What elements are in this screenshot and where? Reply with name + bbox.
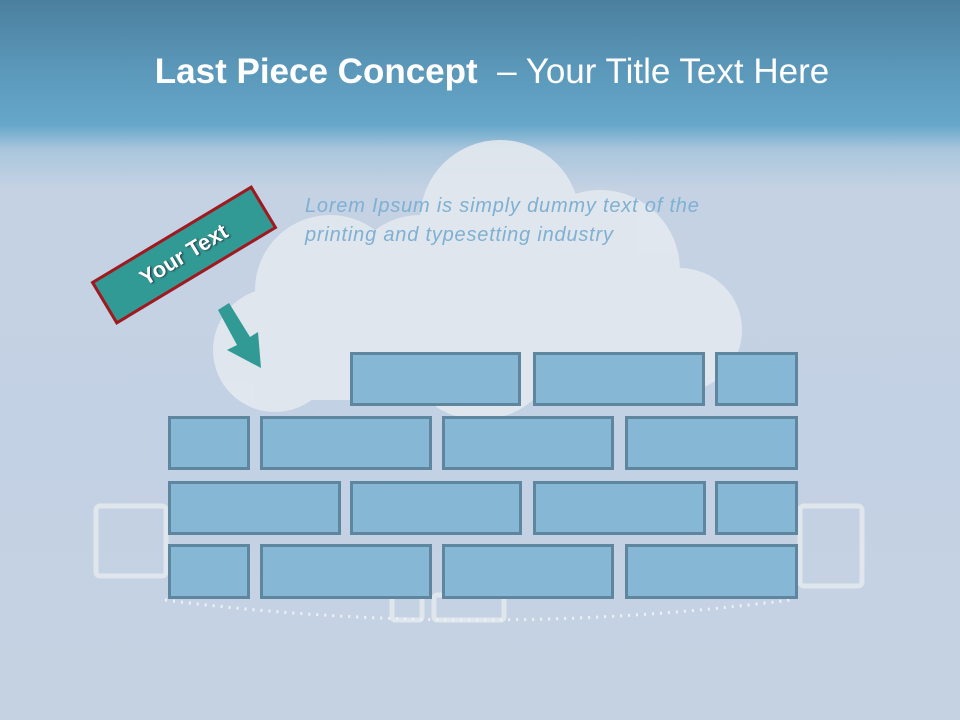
text block: lorem: Lorem Ipsum is simply dummy text of the printing and typesetting industry bbox=[305, 195, 700, 246]
brick wall bbox=[168, 352, 798, 599]
callout tag: Your Text bbox=[91, 185, 277, 325]
arrow bbox=[218, 303, 261, 368]
callout tag: Your Text: Your Text bbox=[135, 219, 232, 291]
title: Last Piece Concept – Your Title Text Here bbox=[155, 52, 829, 91]
